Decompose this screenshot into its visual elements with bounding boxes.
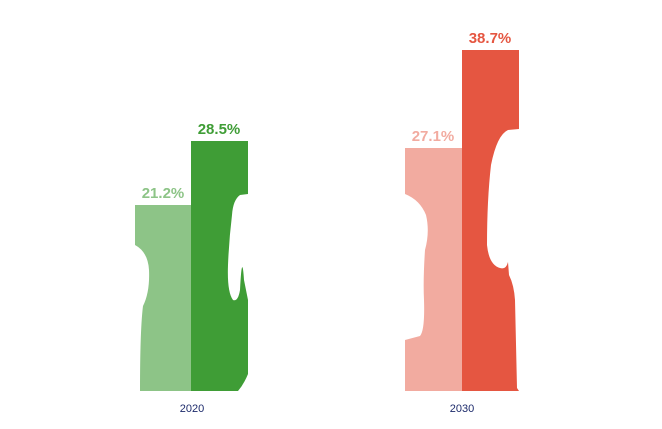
bar: 2030 dark red bbox=[462, 50, 519, 391]
label: 38.7%: 38.7% bbox=[469, 30, 511, 47]
label: 2030: 2030 bbox=[450, 403, 474, 415]
label: 27.1%: 27.1% bbox=[412, 128, 454, 145]
silhouette cutout: 2020 left bbox=[135, 245, 149, 391]
bar: 2030 light red bbox=[405, 148, 463, 391]
bar: 2020 light green bbox=[135, 205, 192, 391]
label: 28.5%: 28.5% bbox=[198, 121, 240, 138]
label: 2020: 2020 bbox=[180, 403, 204, 415]
group: 2030 bars bbox=[405, 30, 519, 415]
label: 21.2%: 21.2% bbox=[142, 185, 184, 202]
bar: 2020 dark green bbox=[191, 141, 248, 391]
silhouette cutout: 2030 left bbox=[405, 194, 428, 340]
group: 2020 bars bbox=[135, 121, 248, 415]
silhouette cutout: 2030 right bbox=[487, 129, 519, 391]
silhouette cutout: 2020 right bbox=[228, 194, 248, 300]
